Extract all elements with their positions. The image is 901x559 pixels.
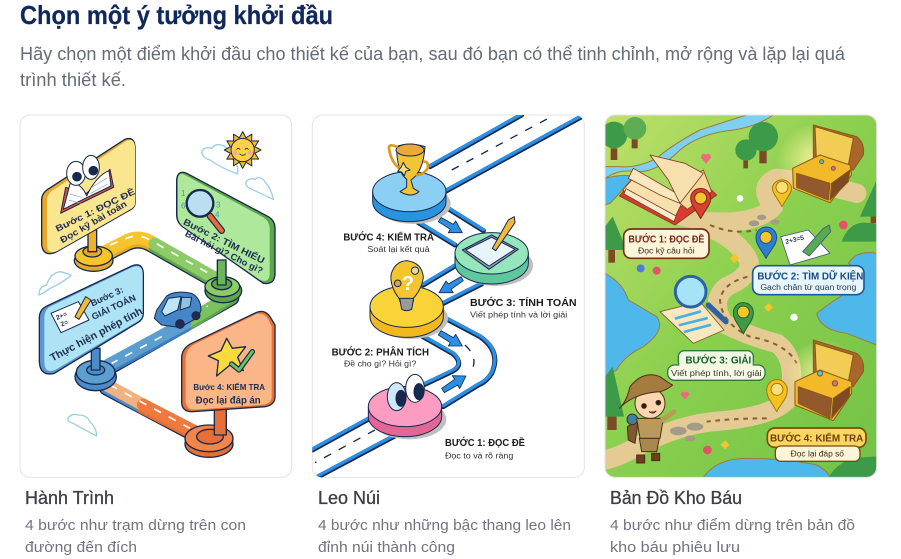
sign base: orange [185, 408, 233, 457]
disc: step 2 [370, 261, 448, 339]
label: step 4: BƯỚC 4: KIỂM TRA [770, 432, 864, 445]
icon: notepad and pencil [781, 225, 831, 265]
sign base: green [205, 260, 242, 303]
sign: Bước 2: Bước 2: TÌM HIỂU [182, 216, 267, 266]
icon: light bulb [391, 261, 423, 302]
caption: Hành Trình: đường đến đích [25, 539, 137, 556]
disc: step 1 [368, 374, 446, 439]
icon: paper and pencil: 2+= [55, 311, 68, 322]
panel: Hành Trình illustration [20, 115, 292, 477]
glow: bottom chest [787, 340, 860, 407]
label: step 4 [767, 428, 866, 461]
stones [670, 215, 780, 441]
icon: magnifier [181, 189, 222, 231]
icon: open book [619, 155, 717, 225]
caption: Bản Đồ Kho Báu: Bản Đồ Kho Báu [610, 488, 742, 508]
icon: yellow pin 2 [767, 380, 787, 412]
sign: Bước 2: Bài hỏi gì? Cho gì? [183, 229, 265, 276]
road [312, 114, 582, 477]
label: step 2: Gạch chân từ quan trọng [760, 283, 856, 292]
icon: open book with eyes [61, 155, 114, 213]
caption: Leo Núi [318, 488, 571, 556]
label: step 1: BƯỚC 1: ĐỌC ĐỀ [445, 437, 526, 449]
description: trình thiết kế. [20, 70, 126, 90]
icon: star and check [208, 338, 246, 376]
sand path [605, 178, 857, 460]
icon: magnifier: 1 [181, 189, 186, 198]
label: step 1 [624, 229, 709, 258]
icon: scroll and magnifier [660, 276, 726, 343]
label: step 2 [753, 266, 864, 295]
caption: Hành Trình [25, 488, 246, 556]
label: step 3: BƯỚC 3: TÍNH TOÁN [470, 297, 577, 309]
caption: Leo Núi: Leo Núi [318, 488, 380, 508]
icon: paper and pencil [51, 297, 91, 333]
road [102, 236, 232, 435]
sign base: blue [75, 348, 116, 391]
panel: Leo Núi illustration [312, 114, 584, 477]
icon: trophy [397, 144, 425, 195]
clouds [39, 145, 273, 436]
dashed trail [707, 225, 797, 422]
label: step 4: Soát lại kết quả [367, 245, 430, 254]
sign: Bước 3 [39, 265, 145, 374]
label: step 3: BƯỚC 3: GIẢI [685, 353, 752, 366]
sign: Bước 4: Đọc lại đáp án [196, 395, 261, 406]
glow: top chest [777, 123, 857, 197]
sign: Bước 1 [42, 139, 137, 254]
caption: Bản Đồ Kho Báu: 4 bước như điểm dừng trên bản đồ [610, 517, 855, 534]
caption: Hành Trình: 4 bước như trạm dừng trên con [25, 517, 246, 534]
icon: green pin [733, 303, 753, 334]
label: step 1: Đọc to và rõ ràng [445, 452, 513, 461]
icon: treasure chest top [793, 125, 864, 203]
icon: eyes [387, 383, 406, 411]
icon: treasure chest bottom [795, 340, 864, 421]
caption: Bản Đồ Kho Báu: kho báu phiêu lưu [610, 539, 740, 556]
label: step 3 [668, 351, 765, 380]
sign: Bước 1: Đọc kỹ bài toán [58, 199, 129, 245]
bushes and flowers [637, 154, 877, 477]
label: step 1: Đọc kỹ câu hỏi [638, 247, 695, 256]
caption: Leo Núi: đỉnh núi thành công [318, 539, 455, 556]
icon: yellow pin [772, 180, 792, 207]
sign base: yellow [74, 230, 113, 271]
caption: Hành Trình: Hành Trình [25, 488, 114, 508]
character: explorer [619, 375, 674, 463]
sign: Bước 4 [182, 311, 275, 412]
icon: magnifier: 3 [216, 200, 221, 209]
icon: magnifier: 4 [215, 210, 220, 219]
caption: Leo Núi: 4 bước như những bậc thang leo lên [318, 517, 571, 534]
title: Chọn một ý tưởng khởi đầu [20, 0, 333, 30]
disc: step 2: ? [402, 272, 414, 295]
label: step 4: Đọc lại đáp số [791, 449, 845, 458]
arrows [438, 217, 466, 393]
icon: blue car [154, 292, 201, 328]
icon: red pin [691, 188, 711, 219]
icon: tablet and pencil [462, 235, 518, 269]
label: step 1: BƯỚC 1: ĐỌC ĐỀ [628, 233, 705, 246]
icon: magnifier: 6 [181, 201, 186, 210]
icon: notepad and pencil: 2+3=5 [785, 235, 805, 246]
label: step 2: BƯỚC 2: TÌM DỮ KIỆN [757, 269, 863, 282]
panel: Bản Đồ Kho Báu illustration [601, 115, 877, 477]
description: Hãy chọn một điểm khởi đầu cho thiết kế của bạn, sau đó bạn có thể tinh chỉnh, mở rộng và lặp lại quá [20, 44, 846, 64]
caption: Bản Đồ Kho Báu [610, 488, 855, 556]
sign: Bước 4: Bước 4: KIỂM TRA [193, 381, 265, 392]
label: step 3: Viết phép tính, lời giải [671, 369, 762, 378]
sign: Bước 3: Bước 3: [89, 285, 125, 308]
rivers [605, 115, 877, 477]
sign: Bước 2 [177, 172, 275, 284]
icon: sun [224, 132, 261, 168]
label: step 2: Đề cho gì? Hỏi gì? [344, 360, 417, 369]
icon: paper and pencil: 2= [60, 319, 70, 329]
label: step 3: Viết phép tính và lời giải [470, 310, 568, 319]
sign: Bước 3: Thực hiện phép tính [48, 305, 145, 364]
disc: step 4 [373, 144, 451, 224]
sign: Bước 1: Bước 1: ĐỌC ĐỀ [54, 187, 137, 234]
sign: Bước 3: GIẢI TOÁN [90, 292, 137, 322]
label: step 2: BƯỚC 2: PHÂN TÍCH [332, 347, 429, 359]
icon: blue pin [756, 227, 777, 258]
disc: step 3 [455, 217, 533, 286]
label: step 4: BƯỚC 4: KIỂM TRA [343, 232, 434, 244]
trees [601, 117, 877, 430]
